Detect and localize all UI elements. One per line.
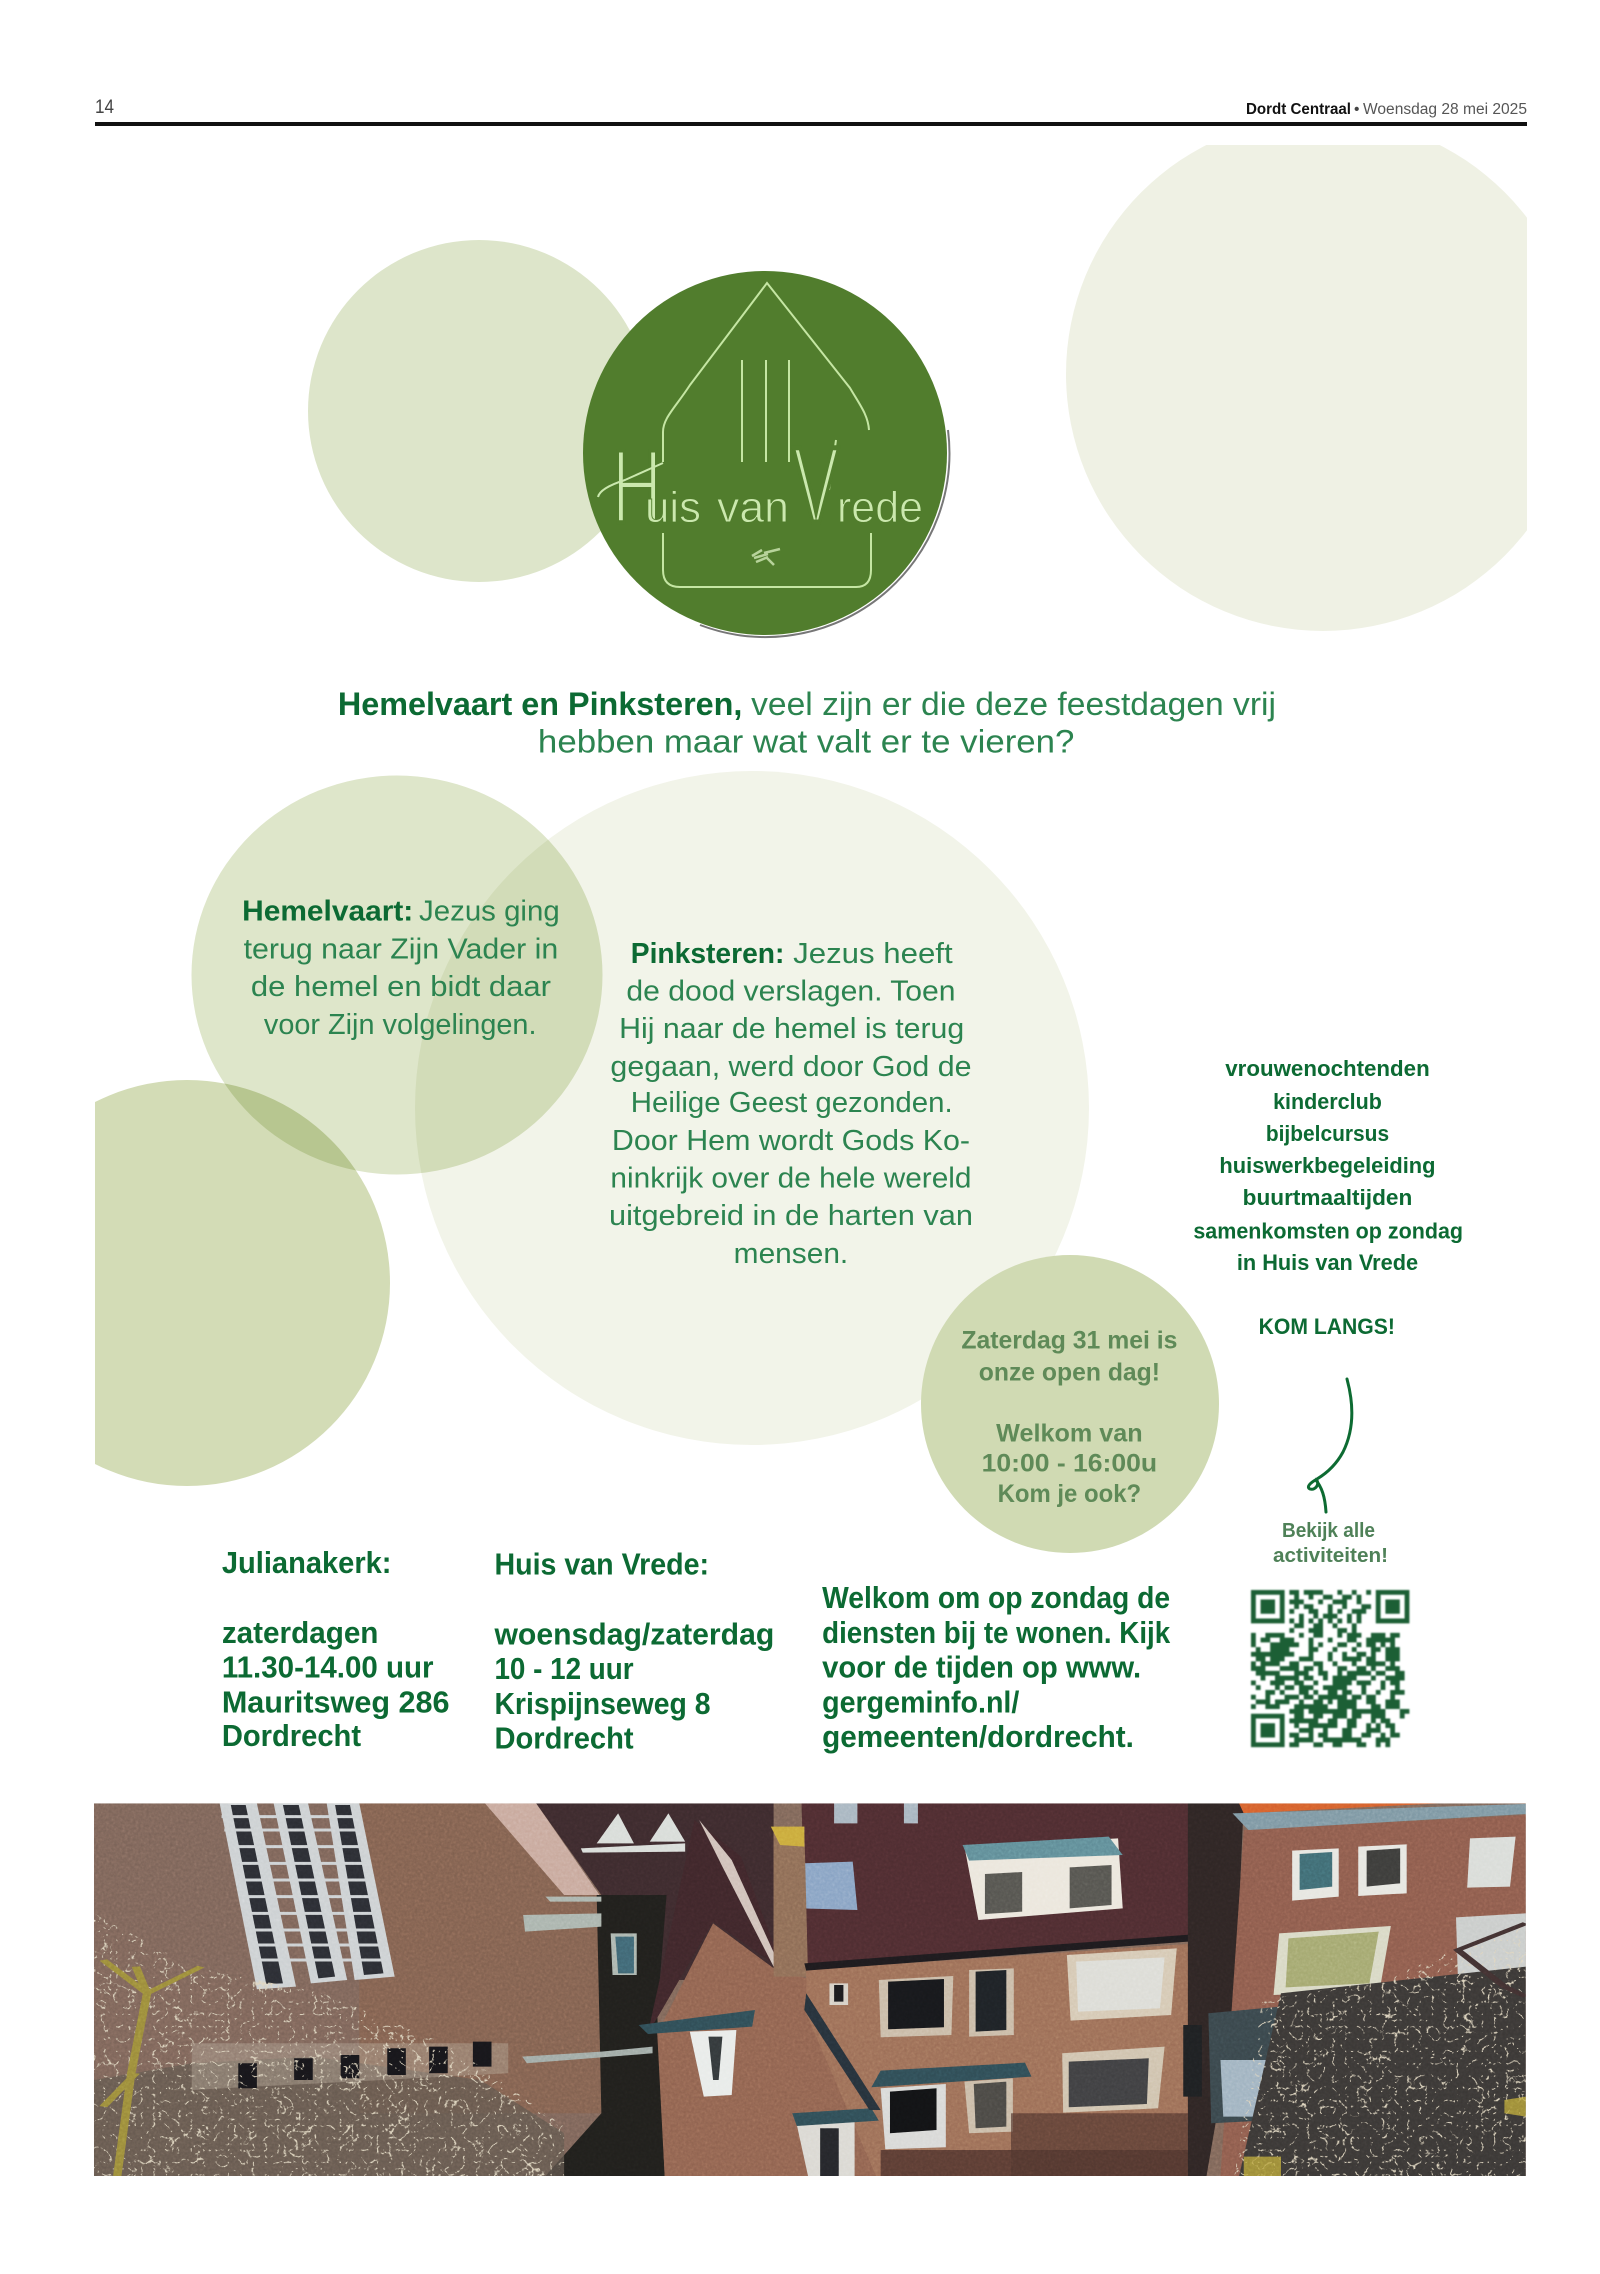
heading: veel zijn er die deze feestdagen vrij (751, 685, 1276, 722)
text: Hemelvaart: terug naar Zijn Vader in (244, 933, 558, 965)
header: newspaper name and date: Woensdag 28 mei 2025 (1363, 101, 1527, 118)
logo wordmark: V (793, 424, 839, 545)
activities list: KOM LANGS! (1259, 1314, 1395, 1339)
text: Julianakerk (222, 1546, 450, 1753)
gable coping (485, 1803, 599, 1895)
text: see all activities: Bekijk alle (1282, 1520, 1375, 1542)
activities list: vrouwenochtenden (1225, 1056, 1430, 1081)
text: Pinksteren (609, 938, 973, 1270)
activities list (1193, 1056, 1463, 1339)
text: Julianakerk: zaterdagen (222, 1616, 378, 1650)
text: Julianakerk: Dordrecht (222, 1719, 361, 1753)
rear roof (536, 1803, 774, 1980)
circle: open day (921, 1255, 1219, 1553)
QR code (1251, 1590, 1409, 1747)
activities list: bijbelcursus (1266, 1121, 1389, 1146)
text: Huis van Vrede (493, 1548, 774, 1756)
right building (1220, 1815, 1526, 2176)
text: open day: 10:00 - 16:00u (982, 1450, 1157, 1478)
large pale circle top right (1066, 145, 1527, 631)
small dormer triangles (581, 1813, 685, 1853)
skylight (802, 1862, 857, 1910)
text: Hemelvaart: Hemelvaart: (242, 896, 413, 928)
text: Sunday welcome: voor de tijden op www. (822, 1651, 1141, 1685)
pitched gable roof (650, 1946, 774, 2024)
photo: brick buildings (94, 1803, 1526, 2176)
text: Sunday welcome: gemeenten/dordrecht. (822, 1720, 1134, 1754)
logo wordmark (612, 424, 923, 545)
right building windows (1274, 1837, 1526, 1995)
text: Huis van Vrede: woensdag/zaterdag (493, 1617, 774, 1651)
text: Pinksteren: Heilige Geest gezonden. (631, 1087, 953, 1119)
text: Hemelvaart (242, 896, 560, 1041)
header: newspaper name and date: Dordt Centraal (1246, 101, 1351, 118)
logo wordmark: uis (645, 483, 701, 532)
bare tree left (94, 1913, 564, 2176)
text: Huis van Vrede: Dordrecht (494, 1722, 634, 1756)
activities list: kinderclub (1273, 1089, 1382, 1114)
header: page number: 14 (95, 97, 114, 118)
text: Julianakerk: Mauritsweg 286 (222, 1685, 449, 1719)
logo wordmark: H (612, 429, 662, 545)
activities list: in Huis van Vrede (1237, 1250, 1418, 1275)
text: Julianakerk: 11.30-14.00 uur (222, 1651, 434, 1685)
logo wordmark: rede (837, 483, 923, 532)
text: see all activities (1273, 1520, 1388, 1567)
text: open day: onze open dag! (979, 1358, 1160, 1386)
activities list: huiswerkbegeleiding (1219, 1153, 1436, 1178)
header: newspaper name and date (1246, 101, 1527, 118)
dark shadow at base (881, 2150, 1188, 2176)
drainpipe and door right (1208, 2007, 1281, 2123)
logo house outline (663, 283, 871, 587)
text: Hemelvaart: de hemel en bidt daar (251, 971, 551, 1003)
text: Sunday welcome: gergeminfo.nl/ (822, 1685, 1020, 1719)
church wall (94, 1803, 601, 2176)
main roof (802, 1803, 1218, 1967)
logo: Huis van Vrede (583, 271, 949, 637)
text: Huis van Vrede: Huis van Vrede: (494, 1548, 709, 1582)
bare tree right (1234, 1920, 1526, 2176)
text: Pinksteren: gegaan, werd door God de (610, 1051, 971, 1083)
text: Huis van Vrede: 10 - 12 uur (494, 1652, 634, 1686)
text: open day: Kom je ook? (998, 1480, 1141, 1508)
arrow to QR code (1308, 1379, 1352, 1512)
pale circle: Pinksteren (415, 771, 1089, 1445)
house wall (806, 1943, 1197, 2176)
house windows (690, 1948, 1177, 2176)
text: Julianakerk: Julianakerk: (222, 1546, 391, 1580)
text: Pinksteren: Jezus heeft (793, 938, 953, 970)
dark gap between buildings (546, 1895, 667, 2176)
text: see all activities: activiteiten! (1273, 1545, 1388, 1567)
heading (338, 685, 1276, 760)
text: Sunday welcome (822, 1581, 1170, 1754)
gable brick (657, 1923, 881, 2176)
text: Pinksteren: de dood verslagen. Toen (626, 976, 956, 1008)
text: Sunday welcome: Welkom om op zondag de (822, 1581, 1170, 1615)
text: open day: Zaterdag 31 mei is (961, 1326, 1177, 1354)
text: Sunday welcome: diensten bij te wonen. Kijk (822, 1616, 1170, 1650)
alley (1188, 1803, 1244, 2176)
activities list: buurtmaaltijden (1243, 1185, 1412, 1210)
circle: Hemelvaart (192, 776, 602, 1174)
text: Pinksteren: Door Hem wordt Gods Ko- (612, 1125, 970, 1157)
text: open day: Welkom van (996, 1419, 1143, 1447)
heading: Hemelvaart en Pinksteren, (338, 685, 742, 722)
eaves (804, 1933, 1218, 1971)
header: newspaper name and date: • (1354, 101, 1359, 118)
heading: hebben maar wat valt er te vieren? (538, 723, 1074, 760)
text: Hemelvaart: voor Zijn volgelingen. (264, 1009, 536, 1041)
logo leaf mark (752, 549, 780, 565)
text: Pinksteren: uitgebreid in de harten van (609, 1200, 973, 1232)
chimney (774, 1827, 808, 1977)
teal lead bands (639, 2010, 1031, 2126)
photo grain (94, 1803, 1526, 2176)
text: Pinksteren: ninkrijk over de hele wereld (610, 1163, 972, 1195)
all text in layout units (222, 685, 1463, 1756)
text: Pinksteren: mensen. (734, 1238, 848, 1270)
church tall windows (220, 1803, 395, 1989)
text: Hemelvaart: Jezus ging (419, 896, 560, 928)
circle behind logo (308, 240, 650, 582)
dormer (963, 1837, 1123, 1920)
text: Pinksteren: Hij naar de hemel is terug (619, 1013, 964, 1045)
activities list: samenkomsten op zondag (1193, 1218, 1463, 1243)
text: Huis van Vrede: Krispijnseweg 8 (494, 1687, 711, 1721)
circle lower left (95, 1080, 390, 1486)
text: Pinksteren: Pinksteren: (631, 938, 784, 970)
right roof (1239, 1803, 1439, 1813)
logo wordmark: van (717, 483, 789, 532)
text: open day (961, 1326, 1177, 1508)
